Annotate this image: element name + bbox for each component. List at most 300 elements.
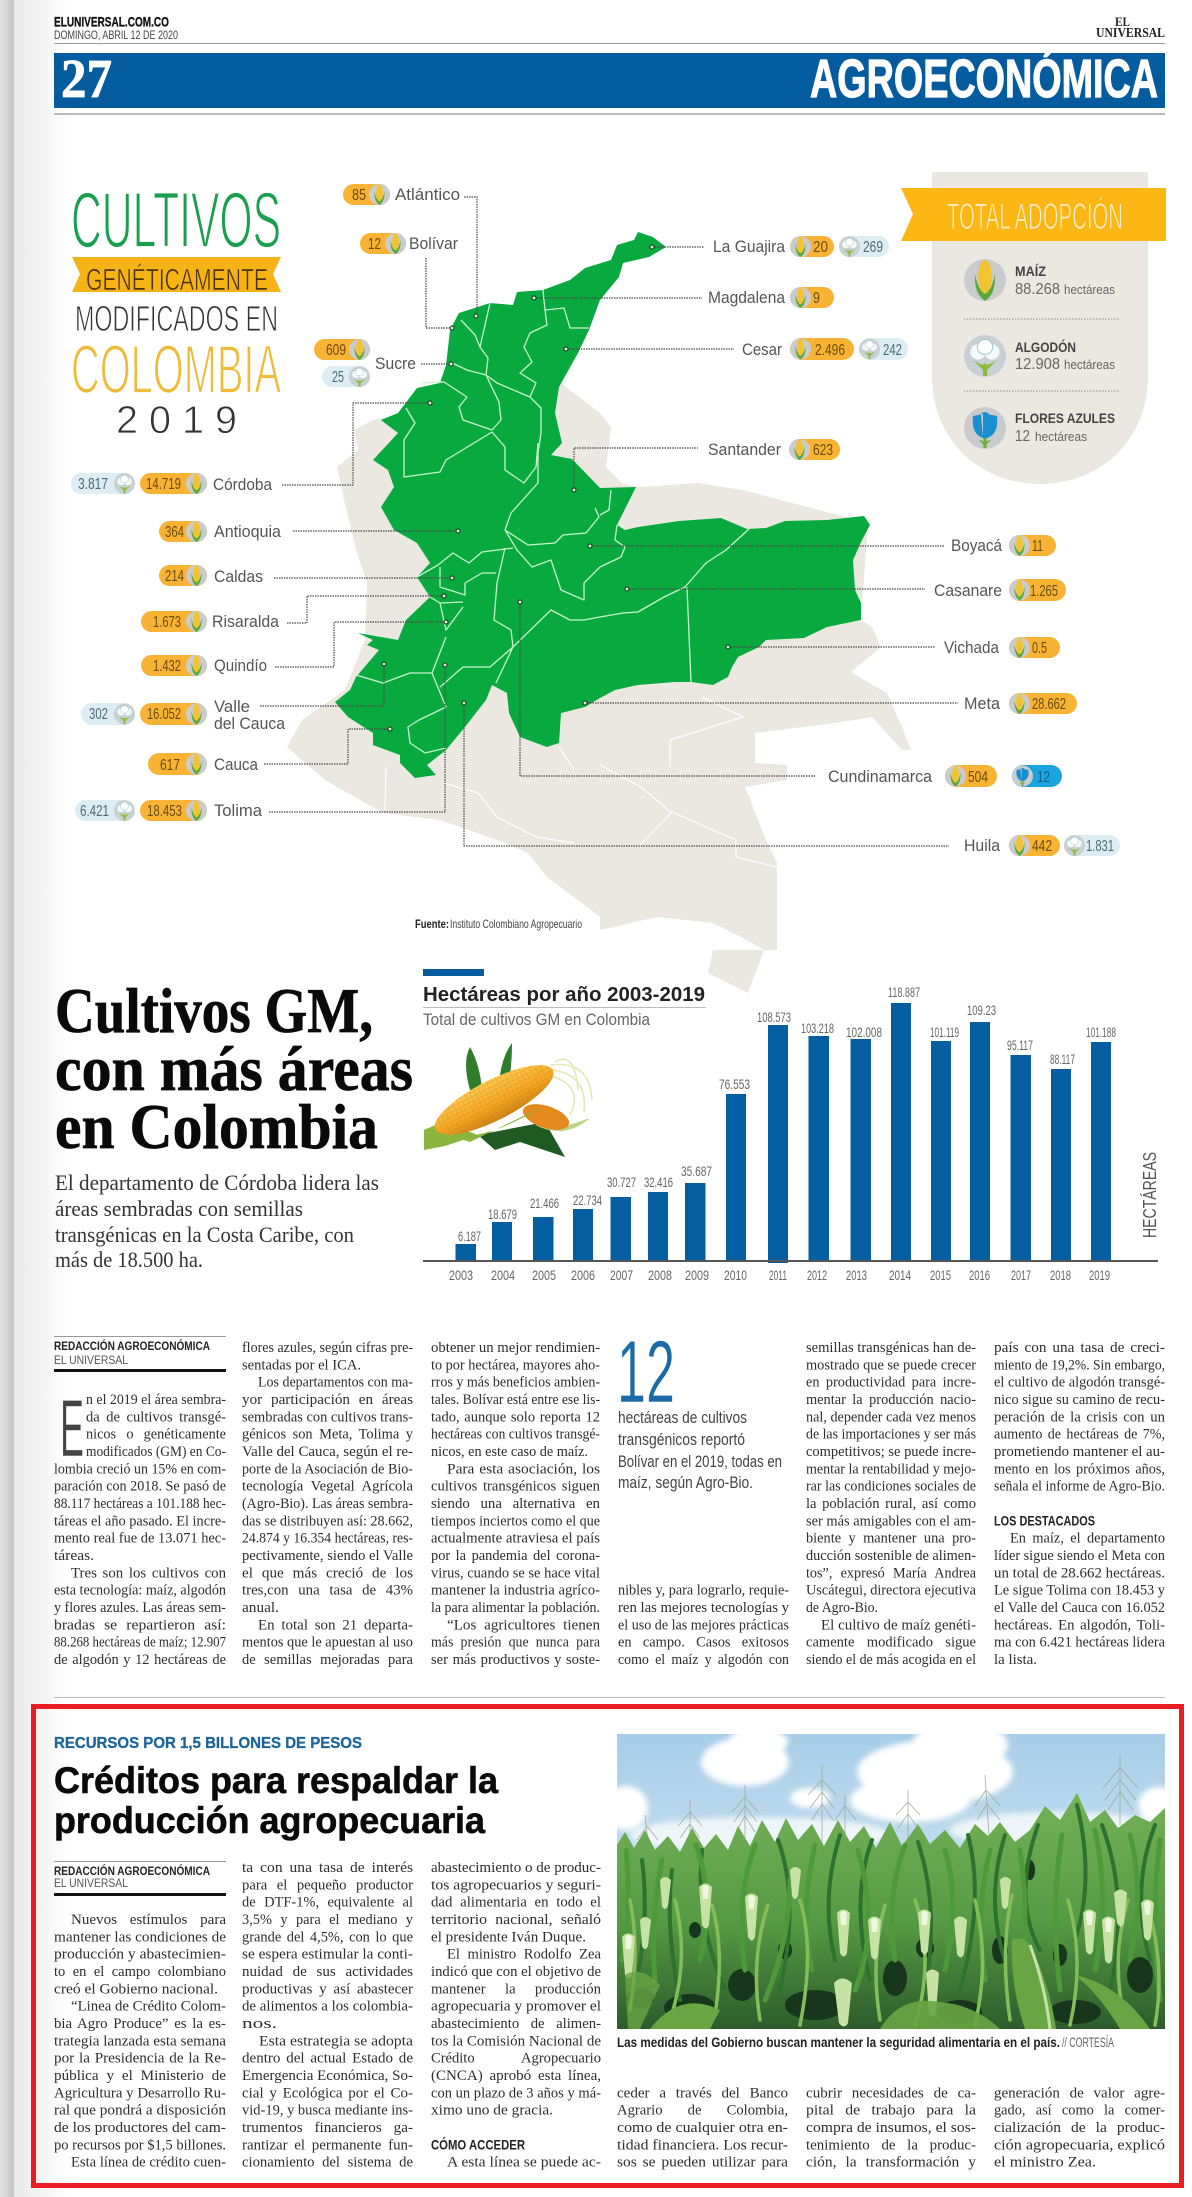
article column 6: miento de 19,2%. Sin embargo, bbox=[994, 1357, 1165, 1373]
corn photo bbox=[424, 1043, 592, 1157]
Cesar: Cesar bbox=[742, 340, 782, 359]
site name and date: ELUNIVERSAL.COM.CO bbox=[54, 14, 169, 30]
Boyacá: Boyacá bbox=[951, 536, 1002, 555]
algodón row: hectáreas bbox=[1064, 357, 1115, 372]
second article column 2: se espera estimular la conti- bbox=[242, 1947, 413, 1963]
flores azules row: hectáreas bbox=[1035, 429, 1087, 444]
masthead bbox=[54, 14, 1165, 115]
article column 3: cultivos transgénicos siguen bbox=[431, 1479, 600, 1495]
article column 1: 88.268 hectáreas de maíz; 12.907 bbox=[54, 1635, 226, 1651]
mid leaf strokes bbox=[622, 1830, 1160, 2000]
second article column 1: Esta línea de crédito cuen- bbox=[71, 2155, 226, 2171]
article column 3: virus, cuando se se hace vital bbox=[431, 1565, 600, 1581]
Risaralda bbox=[141, 611, 280, 632]
newspaper logo: UNIVERSAL bbox=[1096, 26, 1165, 41]
Bolívar: Bolívar bbox=[409, 234, 458, 253]
article column 5: competitivos; se puede incre- bbox=[806, 1444, 976, 1460]
Casanare: Casanare bbox=[934, 581, 1002, 600]
La Guajira: La Guajira bbox=[713, 237, 785, 256]
article column 1 bbox=[54, 1392, 226, 1668]
second article column 3: tos agropecuarios y seguri- bbox=[431, 1877, 601, 1893]
value labels: 88.117 bbox=[1050, 1051, 1075, 1067]
year labels: 2007 bbox=[610, 1267, 633, 1283]
article column 6: país con una tasa de creci- bbox=[994, 1340, 1165, 1356]
article column 1: táreas el año pasado. El incre- bbox=[54, 1513, 226, 1529]
second byline: REDACCIÓN AGROECONÓMICA bbox=[54, 1863, 210, 1878]
second article column 1: mantener las condiciones de bbox=[54, 1929, 226, 1945]
Atlántico: 85 bbox=[352, 187, 366, 204]
standfirst: El departamento de Córdoba lidera las bbox=[55, 1170, 379, 1195]
Antioquia: Antioquia bbox=[214, 522, 282, 541]
second article column 5: compra de insumos, el sos- bbox=[806, 2120, 976, 2136]
second article column 2: vid-19, y busca mediante ins- bbox=[242, 2103, 413, 2119]
infographic title bbox=[71, 175, 281, 442]
second article column 3: El ministro Rodolfo Zea bbox=[447, 1947, 601, 1963]
value labels: 102.008 bbox=[846, 1024, 882, 1040]
second article column 1 bbox=[54, 1912, 227, 2171]
source note: Instituto Colombiano Agropecuario bbox=[450, 917, 582, 931]
article column 5: rar las condiciones sociales de bbox=[806, 1479, 976, 1495]
source note: Fuente: bbox=[415, 917, 449, 931]
Huila: 1.831 bbox=[1086, 838, 1114, 855]
infographic title: COLOMBIA bbox=[71, 331, 281, 408]
infographic title: 2 0 1 9 bbox=[116, 399, 237, 442]
Vichada: Vichada bbox=[944, 638, 999, 657]
Tolima bbox=[75, 800, 263, 821]
article column 5: biente y mantener una pro- bbox=[806, 1531, 976, 1547]
value labels: 101.119 bbox=[930, 1024, 959, 1040]
algodón row: ALGODÓN bbox=[1015, 338, 1076, 355]
year labels: 2006 bbox=[571, 1267, 595, 1283]
article column 4: en campo. Casos exitosos bbox=[618, 1635, 789, 1651]
Tolima: 6.421 bbox=[80, 803, 109, 820]
page edge shadow bbox=[0, 0, 70, 2197]
main headline: Cultivos GM, bbox=[55, 975, 373, 1046]
article column 6: un total de 28.662 hectáreas. bbox=[994, 1565, 1165, 1581]
value labels: 76.553 bbox=[719, 1076, 750, 1092]
flores azules row: FLORES AZULES bbox=[1015, 410, 1115, 426]
article column 5: nal, depender cada vez menos bbox=[806, 1409, 976, 1425]
article column 3: nicos, en este caso de maíz. bbox=[431, 1444, 588, 1460]
Antioquia: 364 bbox=[165, 524, 184, 541]
article column 5: camente modificado sigue bbox=[806, 1635, 976, 1651]
Santander: Santander bbox=[708, 440, 781, 459]
Córdoba: 14.719 bbox=[146, 476, 181, 493]
photo caption: Las medidas del Gobierno buscan mantener la seguridad alimentaria en el país. bbox=[617, 2034, 1060, 2050]
source note bbox=[415, 917, 582, 931]
article column 4: el uso de las mejores prácticas bbox=[618, 1617, 789, 1633]
article column 5: semillas transgénicas han de- bbox=[806, 1340, 976, 1356]
Cesar: 2.496 bbox=[815, 342, 845, 359]
photo caption: // CORTESÍA bbox=[1062, 2034, 1114, 2050]
article column 4: como el maíz y algodón con bbox=[618, 1652, 789, 1668]
article column 3: hectáreas con cultivos transgé- bbox=[431, 1427, 600, 1443]
La Guajira: 269 bbox=[863, 239, 883, 256]
year labels bbox=[449, 1267, 1110, 1283]
second article column 3: dad alimentaria en todo el bbox=[431, 1895, 601, 1911]
Meta bbox=[964, 693, 1077, 714]
Córdoba: Córdoba bbox=[213, 475, 272, 494]
article column 3: siendo una alternativa en bbox=[431, 1496, 600, 1512]
bar chart: hectáreas por año: Total de cultivos GM en Colombia bbox=[423, 1010, 650, 1029]
bright foreground leaves bbox=[625, 1938, 1150, 2029]
green departments bbox=[335, 232, 870, 778]
second article column 2 bbox=[242, 1860, 413, 2171]
ribbon heading bbox=[901, 188, 1166, 241]
Sucre: Sucre bbox=[375, 354, 416, 373]
article column 6: aumento de hectáreas de 7%, bbox=[994, 1427, 1165, 1443]
value labels: 108.573 bbox=[757, 1009, 791, 1025]
article column 1: táreas. bbox=[54, 1548, 94, 1564]
ribbon: genéticamente bbox=[72, 257, 281, 297]
second article column 1: trategia lanzada esta semana bbox=[54, 2033, 226, 2049]
second article column 3 bbox=[431, 1860, 601, 2171]
article byline bbox=[54, 1336, 226, 1372]
article column 3: actualmente atraviesa el país bbox=[431, 1531, 600, 1547]
article column 4 bbox=[618, 1583, 789, 1668]
section bar bbox=[54, 48, 1165, 109]
article column 2: tres,con una tasa de 43% bbox=[242, 1583, 413, 1599]
article column 5: en productividad para incre- bbox=[806, 1375, 976, 1391]
Vichada bbox=[944, 637, 1060, 658]
year labels: 2016 bbox=[969, 1267, 990, 1283]
article column 6: señala el informe de Agro-Bio. bbox=[994, 1479, 1165, 1495]
article column 2: anual. bbox=[242, 1600, 279, 1616]
year labels: 2005 bbox=[532, 1267, 556, 1283]
article column 3: to por hectárea, mayores aho- bbox=[431, 1357, 600, 1373]
article column 5: la población rural, así como bbox=[806, 1496, 976, 1512]
article column 6: mento en los próximos años, bbox=[994, 1461, 1165, 1477]
value labels: 21.466 bbox=[530, 1195, 559, 1211]
year labels: 2014 bbox=[889, 1267, 911, 1283]
article column 5: El cultivo de maíz genéti- bbox=[821, 1617, 976, 1633]
article column 2: En total son 21 departa- bbox=[258, 1617, 413, 1633]
article column 6: líder sigue siendo el Meta con bbox=[994, 1548, 1165, 1564]
second article column 3: territorio nacional, señaló bbox=[431, 1912, 601, 1928]
bar chart: hectáreas por año bbox=[423, 969, 1160, 1283]
article byline: REDACCIÓN AGROECONÓMICA bbox=[54, 1338, 210, 1353]
value labels bbox=[458, 984, 1116, 1244]
second article column 5: pital de trabajo para la bbox=[806, 2103, 976, 2119]
article column 2: flores azules, según cifras pre- bbox=[242, 1340, 413, 1356]
maíz row: hectáreas bbox=[1064, 282, 1115, 297]
panel: red highlight frame bbox=[34, 1706, 1182, 2186]
second article column 1: de los productores del cam- bbox=[54, 2120, 226, 2136]
Huila: 442 bbox=[1032, 838, 1052, 855]
year labels: 2010 bbox=[724, 1267, 747, 1283]
Casanare bbox=[934, 579, 1066, 601]
Santander: 623 bbox=[813, 442, 833, 459]
value labels: 118.887 bbox=[888, 984, 920, 1000]
article column 1: da de cultivos transgé- bbox=[86, 1409, 226, 1425]
Cauca: Cauca bbox=[214, 755, 258, 774]
value labels: 103.218 bbox=[801, 1020, 834, 1036]
ribbon: genéticamente: GENÉTICAMENTE bbox=[86, 262, 268, 297]
article column 2: sembradas con cultivos trans- bbox=[242, 1409, 413, 1425]
article column 2: el que más creció de los bbox=[242, 1565, 413, 1581]
photo: corn field bbox=[604, 1721, 1182, 2029]
second article column 3: con un plazo de 3 años y má- bbox=[431, 2085, 601, 2101]
Quindío: 1.432 bbox=[153, 658, 181, 675]
Huila: Huila bbox=[964, 836, 1000, 855]
beige neighbouring map bbox=[287, 380, 911, 993]
year labels: 2008 bbox=[648, 1267, 672, 1283]
year labels: 2019 bbox=[1089, 1267, 1110, 1283]
article column 5: ser más amigables con el am- bbox=[806, 1513, 976, 1529]
article column 1: bradas se repartieron así: bbox=[54, 1617, 226, 1633]
Magdalena: 9 bbox=[813, 290, 820, 307]
second article column 4 bbox=[617, 2085, 788, 2171]
second article column 3: indicó que con el objetivo de bbox=[431, 1964, 601, 1980]
second article column 1: creó el Gobierno nacional. bbox=[54, 1981, 218, 1997]
Córdoba: 3.817 bbox=[78, 476, 108, 493]
text: E bbox=[60, 1384, 84, 1474]
second article column 1: bia Agro Produce” es la es- bbox=[54, 2016, 226, 2032]
main headline: en Colombia bbox=[55, 1091, 378, 1162]
Bolívar: 12 bbox=[368, 236, 381, 253]
article column 1: esta tecnología: maíz, algodón bbox=[54, 1583, 226, 1599]
article column 1: Tres son los cultivos con bbox=[71, 1565, 226, 1581]
second article column 2: dentro del actual Estado de bbox=[242, 2051, 413, 2067]
article column 3: la para alimentar la población. bbox=[431, 1600, 600, 1616]
Tolima: 18.453 bbox=[147, 803, 182, 820]
article column 6: Le sigue Tolima con 18.453 y bbox=[994, 1583, 1165, 1599]
second headline bbox=[54, 1760, 498, 1841]
second byline bbox=[54, 1861, 226, 1896]
second headline: producción agropecuaria bbox=[54, 1800, 485, 1841]
article byline: EL UNIVERSAL bbox=[54, 1353, 128, 1367]
year labels: 2011 bbox=[769, 1267, 787, 1283]
callout: 12 hectáreas: transgénicos reportó bbox=[618, 1430, 745, 1449]
leader lines bbox=[260, 197, 958, 846]
newspaper logo: EL bbox=[1115, 14, 1130, 29]
Sucre bbox=[314, 339, 416, 387]
year labels: 2009 bbox=[685, 1267, 709, 1283]
standfirst bbox=[55, 1170, 379, 1272]
Meta: 28.662 bbox=[1032, 696, 1066, 713]
value labels: 22.734 bbox=[573, 1192, 602, 1208]
article column 3: tiempos inciertos como el que bbox=[431, 1513, 600, 1529]
Valle del Cauca: 302 bbox=[89, 706, 108, 723]
department borders bbox=[356, 290, 749, 753]
article column 4: nibles y, para lograrlo, requie- bbox=[618, 1583, 789, 1599]
callout: 12 hectáreas: maíz, según Agro-Bio. bbox=[618, 1473, 753, 1492]
article column 5 bbox=[806, 1340, 976, 1668]
flores azules row: 12 bbox=[1015, 428, 1030, 445]
Valle del Cauca: del Cauca bbox=[214, 714, 285, 733]
Santander bbox=[708, 439, 840, 460]
article column 3: tado, aunque solo reporta 12 bbox=[431, 1409, 600, 1425]
second article column 1: por la Presidencia de la Re- bbox=[54, 2051, 226, 2067]
Caldas: Caldas bbox=[214, 567, 263, 586]
article column 5: de Agro-Bio. bbox=[806, 1600, 878, 1616]
Cundinamarca: 12 bbox=[1037, 769, 1050, 786]
maíz row bbox=[964, 259, 1115, 301]
standfirst: áreas sembradas con semillas bbox=[55, 1196, 303, 1221]
article column 2: de semillas mejoradas para bbox=[242, 1652, 413, 1668]
Antioquia bbox=[159, 521, 282, 542]
second article column 1: “Linea de Crédito Colom- bbox=[71, 1999, 226, 2015]
second article column 2: Esta estrategia se adopta bbox=[259, 2033, 413, 2049]
La Guajira: 20 bbox=[813, 239, 828, 256]
year labels: 2012 bbox=[807, 1267, 827, 1283]
second article column 2: nuidad de sus actividades bbox=[242, 1964, 413, 1980]
article column 6: LOS DESTACADOS bbox=[994, 1512, 1095, 1528]
article column 2: das se distribuyen así: 28.662, bbox=[242, 1513, 413, 1529]
Meta: Meta bbox=[964, 694, 1001, 713]
Huila bbox=[964, 835, 1120, 856]
article column 1: de algodón y 12 hectáreas de bbox=[54, 1652, 226, 1668]
article column 5: tos”, expresó María Andrea bbox=[806, 1565, 976, 1581]
site name and date: DOMINGO, ABRIL 12 DE 2020 bbox=[54, 28, 178, 42]
article column 2 bbox=[242, 1340, 413, 1668]
second article column 1: Agricultura y Desarrollo Ru- bbox=[54, 2085, 226, 2101]
article column 1: modificados (GM) en Co- bbox=[86, 1444, 226, 1460]
article column 4: ren las mejores tecnologías y bbox=[618, 1600, 789, 1616]
infographic title: CULTIVOS bbox=[71, 175, 281, 264]
second article column 4: sos se pueden utilizar para bbox=[617, 2155, 788, 2171]
second article column 6: gado, así como la comer- bbox=[994, 2103, 1165, 2119]
article column 3: rros y más beneficios ambien- bbox=[431, 1375, 600, 1391]
bar chart: hectáreas por año: Hectáreas por año 2003-2019 bbox=[423, 984, 705, 1006]
value labels: 95.117 bbox=[1007, 1037, 1033, 1053]
second article column 3: tos la Comisión Nacional de bbox=[431, 2033, 601, 2049]
second article column 3: Crédito Agropecuario bbox=[431, 2051, 601, 2067]
panel: total adopción bbox=[901, 172, 1166, 484]
second article column 2: ta con una tasa de interés bbox=[242, 1860, 413, 1876]
dark gaps bbox=[626, 1860, 1153, 2024]
article column 3: obtener un mejor rendimien- bbox=[431, 1340, 600, 1356]
Casanare: 1.265 bbox=[1030, 583, 1058, 600]
article column 2: 24.874 y 16.354 hectáreas, res- bbox=[242, 1531, 413, 1547]
value labels: 6.187 bbox=[458, 1228, 481, 1244]
second article column 1: pública y el Ministerio de bbox=[54, 2068, 226, 2084]
second article column 2: de alimentos a los colombia- bbox=[242, 1999, 413, 2015]
map of Colombia bbox=[260, 197, 958, 993]
second article column 2: productivas y así abastecer bbox=[242, 1981, 413, 1997]
article column 3: más presión que nunca para bbox=[431, 1635, 600, 1651]
Magdalena: Magdalena bbox=[708, 288, 785, 307]
article column 2: Valle del Cauca, según el re- bbox=[242, 1444, 413, 1460]
flores azules row bbox=[964, 407, 1115, 449]
second article column 4: tidad financiera. Los recur- bbox=[617, 2137, 788, 2153]
kicker: RECURSOS POR 1,5 BILLONES DE PESOS bbox=[54, 1735, 362, 1752]
callout: 12 hectáreas: 12 bbox=[617, 1322, 675, 1421]
Atlántico: Atlántico bbox=[395, 185, 460, 204]
second article column 2: Emergencia Económica, So- bbox=[242, 2068, 413, 2084]
main headline: con más áreas bbox=[55, 1033, 413, 1104]
Boyacá bbox=[951, 535, 1056, 556]
second article column 5: tenimiento de la produc- bbox=[806, 2137, 976, 2153]
section bar: 27 bbox=[61, 48, 112, 109]
Risaralda: 1.673 bbox=[153, 614, 181, 631]
article column 5: mentar la rentabilidad y mejo- bbox=[806, 1461, 976, 1477]
Sucre: 609 bbox=[326, 342, 346, 359]
article column 2: Los departamentos con ma- bbox=[258, 1375, 413, 1391]
algodón row bbox=[964, 335, 1115, 377]
second article column 6: el ministro Zea. bbox=[994, 2155, 1096, 2171]
second article column 3: mantener la producción bbox=[431, 1981, 601, 1997]
year labels: 2003 bbox=[449, 1267, 473, 1283]
newspaper logo bbox=[1096, 14, 1165, 41]
second article column 2: cial y Ecológica por el Co- bbox=[242, 2085, 413, 2101]
Cesar bbox=[742, 338, 908, 360]
year labels: 2013 bbox=[846, 1267, 867, 1283]
maíz row: MAÍZ bbox=[1015, 263, 1046, 279]
pale leaf tips bbox=[622, 1867, 1154, 2026]
article column 6: la lista. bbox=[994, 1652, 1037, 1668]
article column 5: mostrado que se puede crecer bbox=[806, 1357, 976, 1373]
year labels: 2004 bbox=[491, 1267, 515, 1283]
callout: 12 hectáreas: hectáreas de cultivos bbox=[618, 1408, 747, 1427]
Atlántico bbox=[343, 184, 460, 205]
article column 3: Para esta asociación, los bbox=[447, 1461, 600, 1477]
value labels: 32.416 bbox=[644, 1174, 673, 1190]
article column 5: Uscátegui, directora ejecutiva bbox=[806, 1583, 976, 1599]
value labels: 30.727 bbox=[607, 1174, 636, 1190]
article column 1: paración con 2018. Se pasó de bbox=[54, 1479, 226, 1495]
site name and date bbox=[54, 14, 178, 42]
second article column 2: 3,5% y para el mediano y bbox=[242, 1912, 413, 1928]
year labels: 2017 bbox=[1011, 1267, 1031, 1283]
second article column 6: cialización de la produc- bbox=[994, 2120, 1165, 2136]
second article column 3: A esta línea se puede ac- bbox=[447, 2155, 601, 2171]
Córdoba bbox=[71, 473, 272, 494]
article column 2: tecnología Vegetal Agrícola bbox=[242, 1479, 413, 1495]
Cauca: 617 bbox=[160, 757, 180, 774]
article column 6: peración de la crisis con un bbox=[994, 1409, 1165, 1425]
Valle del Cauca: 16.052 bbox=[147, 706, 181, 723]
second article column 3: ximo uno de gracia. bbox=[431, 2103, 553, 2119]
second article column 2: grande del 4,5%, con lo que bbox=[242, 1929, 413, 1945]
article column 1: lombia creció un 15% en com- bbox=[54, 1461, 226, 1477]
second article column 6 bbox=[994, 2085, 1165, 2171]
second article column 3: agropecuaria y promover el bbox=[431, 1999, 601, 2015]
second article column 3: abastecimiento de alimen- bbox=[431, 2016, 601, 2032]
Sucre: 25 bbox=[332, 369, 344, 386]
article column 1: 88.117 hectáreas a 101.188 hec- bbox=[54, 1496, 226, 1512]
second article column 1: to en el campo colombiano bbox=[54, 1964, 226, 1980]
Cundinamarca: 504 bbox=[968, 769, 988, 786]
second article column 2: trumentos financieros ga- bbox=[242, 2120, 413, 2136]
algodón row: 12.908 bbox=[1015, 356, 1060, 373]
article column 6: hectáreas. En algodón, Toli- bbox=[994, 1617, 1165, 1633]
article column 5: siendo el de más acogida en el bbox=[806, 1652, 976, 1668]
second article column 6: generación de valor agre- bbox=[994, 2085, 1165, 2101]
second article column 3: abastecimiento o de produc- bbox=[431, 1860, 601, 1876]
second article column 6: ción agropecuaria, explicó bbox=[994, 2137, 1165, 2153]
callout: 12 hectáreas bbox=[617, 1322, 782, 1492]
Cauca bbox=[148, 753, 258, 775]
tassels bbox=[636, 1755, 1138, 1843]
article column 2: sentadas por el ICA. bbox=[242, 1357, 361, 1373]
article column 1: nicos o genéticamente bbox=[86, 1427, 226, 1443]
second article column 1: ral que pondrá a disposición bbox=[54, 2103, 227, 2119]
Cesar: 242 bbox=[883, 342, 902, 359]
Caldas: 214 bbox=[165, 568, 184, 585]
article column 3: por la pandemia del corona- bbox=[431, 1548, 600, 1564]
Quindío bbox=[141, 655, 267, 676]
second article column 1: po recursos por $1,5 billones. bbox=[54, 2137, 226, 2153]
article column 1: n el 2019 el área sembra- bbox=[86, 1392, 226, 1408]
article column 6: el cultivo de algodón transgé- bbox=[994, 1375, 1165, 1391]
left department labels bbox=[71, 184, 460, 821]
article column 2: yor participación en áreas bbox=[242, 1392, 413, 1408]
article column 6: prometiendo mantener el au- bbox=[994, 1444, 1165, 1460]
dark leaf strokes bbox=[635, 1805, 1155, 2000]
value labels: 109.23 bbox=[967, 1002, 996, 1018]
article column 3: tales. Bolívar está entre ese lis- bbox=[431, 1392, 600, 1408]
